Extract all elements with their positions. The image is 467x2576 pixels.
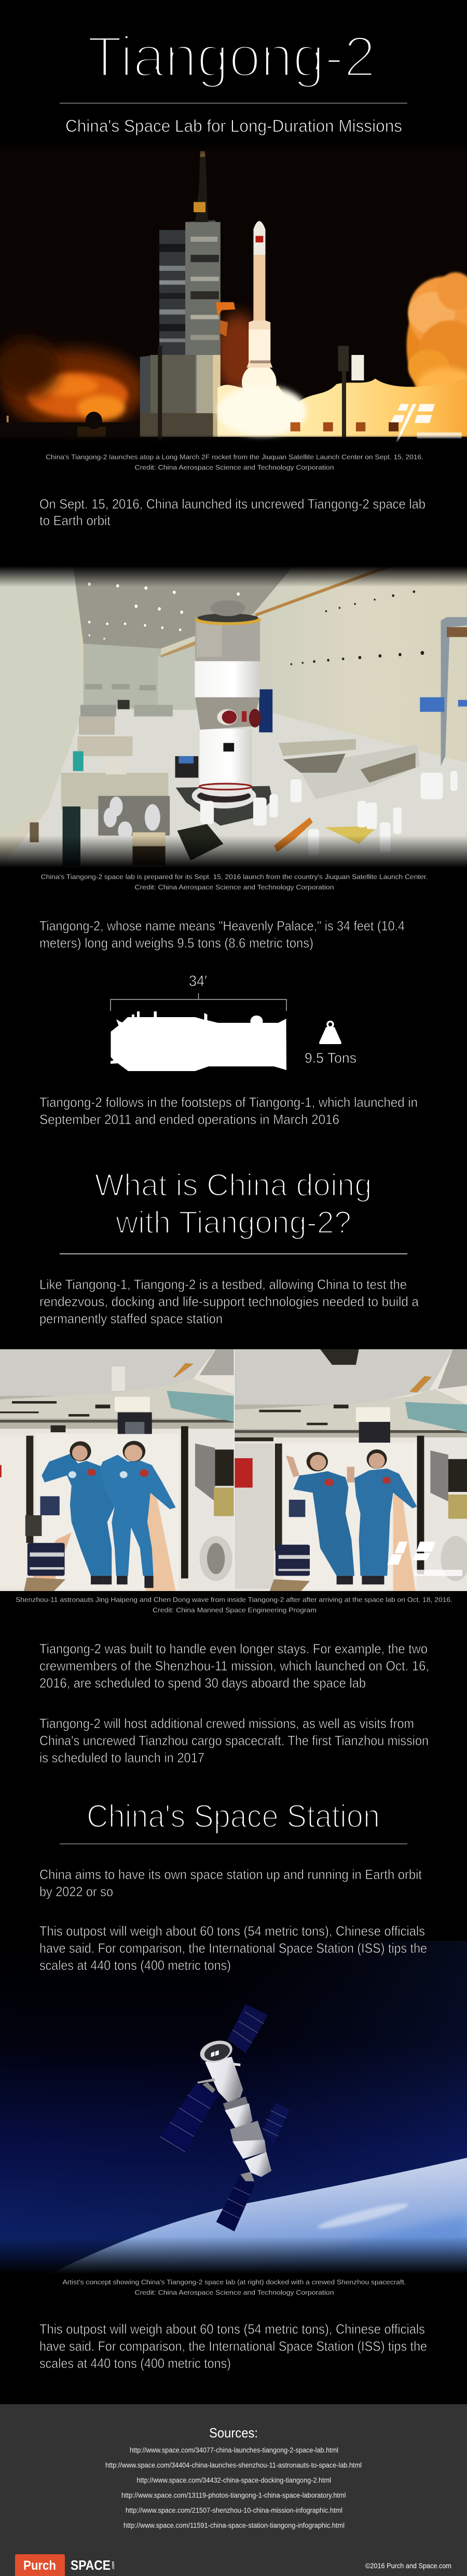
source links bbox=[105, 2446, 362, 2529]
text: longer stays: Tiangong-2 was built to handle even longer stays. For example, the two bbox=[39, 1641, 428, 1656]
text: 2022 goal: China aims to have its own space station up and running in Earth orbit bbox=[39, 1867, 422, 1882]
floodlight pole and lamp bbox=[158, 346, 364, 441]
text: outpost weight, repeated: scales at 440 tons (400 metric tons) bbox=[39, 2355, 231, 2371]
heading: what is China doing: with Tiangong-2? bbox=[115, 1205, 351, 1240]
text: launch date bbox=[39, 496, 425, 528]
left horizon glow bbox=[0, 338, 146, 430]
length label: 34′ bbox=[189, 973, 207, 990]
divider bbox=[234, 1349, 235, 1592]
caption: assembly hall: China's Tiangong-2 space lab is prepared for its Sept. 15, 2016 launch from the country's Jiuquan Satellite Launch Center. bbox=[41, 873, 428, 881]
text: footsteps: September 2011 and ended operations in March 2016 bbox=[39, 1112, 339, 1127]
sources heading: Sources: bbox=[209, 2425, 258, 2441]
text: longer stays: 2016, are scheduled to spend 30 days aboard the space lab bbox=[39, 1675, 366, 1691]
heading: what is China doing bbox=[60, 1168, 407, 1254]
text: outpost weight, repeated bbox=[39, 2321, 427, 2371]
wall dot rows bbox=[291, 591, 424, 665]
text: dimensions: Tiangong-2, whose name means "Heavenly Palace," is 34 feet (10.4 bbox=[39, 918, 405, 934]
text: testbed bbox=[39, 1277, 419, 1326]
caption: assembly hall: Credit: China Aerospace Science and Technology Corporation bbox=[135, 883, 334, 891]
logo: Purch: Purch bbox=[23, 2558, 56, 2573]
watermark logo bbox=[387, 1542, 462, 1576]
caption: launch: Credit: China Aerospace Science and Technology Corporation bbox=[135, 463, 334, 471]
rocket bbox=[246, 221, 272, 368]
icon: weight bbox=[319, 1021, 341, 1044]
back hall benches bbox=[61, 700, 173, 809]
heading: China's Space Station: China's Space Station bbox=[87, 1799, 380, 1834]
text: testbed: rendezvous, docking and life-support technologies needed to build a bbox=[39, 1294, 419, 1309]
hall walls, ceiling, floor bbox=[0, 564, 467, 869]
photo: assembly hall bbox=[0, 564, 467, 869]
text: launch date: to Earth orbit bbox=[39, 513, 111, 528]
text: 2022 goal bbox=[39, 1867, 422, 1899]
text: dimensions: meters) long and weighs 9.5 tons (8.6 metric tons) bbox=[39, 935, 313, 951]
panel: sources footer bbox=[0, 2404, 467, 2576]
ceiling lights bbox=[88, 582, 240, 640]
caption: station bbox=[62, 2278, 406, 2296]
photo: rocket launch bbox=[0, 143, 467, 446]
turntable under module bbox=[176, 783, 272, 826]
text: 2022 goal: by 2022 or so bbox=[39, 1884, 113, 1899]
solar panels bbox=[160, 2004, 290, 2231]
text: outpost weight, first mention bbox=[39, 1923, 427, 1973]
ground silhouettes bbox=[0, 412, 399, 437]
earth limb bbox=[42, 2158, 467, 2278]
left frame interior bbox=[0, 1349, 234, 1592]
text: footsteps bbox=[39, 1094, 418, 1127]
label: weight: 9.5 Tons bbox=[305, 1050, 356, 1066]
bracket bbox=[111, 993, 286, 1011]
text: longer stays bbox=[39, 1641, 429, 1691]
spacecraft silhouette bbox=[111, 1011, 286, 1071]
right frame interior bbox=[235, 1349, 467, 1592]
caption: station: Credit: China Aerospace Science and Technology Corporation bbox=[135, 2289, 334, 2296]
logo: Space.com: SPACE bbox=[71, 2557, 111, 2573]
photo: astronauts inside Tiangong-2 bbox=[0, 1349, 467, 1592]
copyright: ©2016 Purch and Space.com bbox=[365, 2561, 451, 2570]
text: outpost weight, repeated: This outpost will weigh about 60 tons (54 metric tons), Chinese officials bbox=[39, 2321, 425, 2337]
source links: http://www.space.com/11591-china-space-station-tiangong-infographic.html bbox=[123, 2522, 345, 2529]
source links: http://www.space.com/34404-china-launches-shenzhou-11-astronauts-to-space-lab.html bbox=[105, 2461, 362, 2469]
source links: http://www.space.com/13119-photos-tiangong-1-china-space-laboratory.html bbox=[121, 2491, 346, 2499]
orange trolley bbox=[274, 817, 313, 852]
Tiangong-2 module bbox=[195, 600, 261, 797]
text: additional missions: Tiangong-2 will host additional crewed missions, as well as visits from bbox=[39, 1716, 414, 1731]
text: outpost weight, first mention: This outpost will weigh about 60 tons (54 metric tons), Chinese officials bbox=[39, 1923, 425, 1939]
source links: http://www.space.com/21507-shenzhou-10-china-mission-infographic.html bbox=[126, 2506, 342, 2514]
source links: http://www.space.com/34077-china-launches-tiangong-2-space-lab.html bbox=[130, 2446, 338, 2454]
wall details bbox=[85, 564, 467, 766]
glow behind tower bbox=[220, 304, 253, 388]
smoke cloud right bbox=[405, 270, 467, 387]
watermark logo bbox=[391, 404, 462, 446]
mast bbox=[194, 151, 208, 222]
astronauts, right frame bbox=[286, 1449, 417, 1584]
text: additional missions bbox=[39, 1716, 429, 1765]
text: dimensions bbox=[39, 918, 405, 951]
caption: assembly hall bbox=[41, 873, 428, 891]
technicians bbox=[200, 771, 458, 856]
solar array stands bbox=[279, 739, 420, 844]
text: launch date: On Sept. 15, 2016, China launched its uncrewed Tiangong-2 space lab bbox=[39, 496, 425, 512]
text: footsteps: Tiangong-2 follows in the footsteps of Tiangong-1, which launched in bbox=[39, 1094, 418, 1110]
caption: astronauts: Shenzhou-11 astronauts Jing Haipeng and Chen Dong wave from inside Tiangong-2 after after arriving at the space lab on Oct. 18, 2016. bbox=[16, 1596, 452, 1604]
logo: Purch bbox=[15, 2554, 65, 2576]
text: outpost weight, first mention: scales at 440 tons (400 metric tons) bbox=[39, 1957, 231, 1973]
work table area and crew bbox=[30, 756, 224, 866]
photo: station in orbit bbox=[0, 1941, 467, 2278]
heading: what is China doing: What is China doing bbox=[94, 1168, 372, 1202]
title: Tiangong-2 bbox=[87, 25, 376, 89]
logo: Space.com: .com bbox=[112, 2561, 115, 2570]
caption: astronauts bbox=[16, 1596, 452, 1614]
caption: launch: China's Tiangong-2 launches atop a Long March 2F rocket from the Jiuquan Satellite Launch Center on Sept. 15, 2016. bbox=[46, 453, 423, 461]
caption: station: Artist's concept showing China's Tiangong-2 space lab (at right) docked with a crewed Shenzhou spacecraft. bbox=[62, 2278, 406, 2286]
flame jets at tower bbox=[216, 302, 235, 317]
text: outpost weight, first mention: have said. For comparison, the International Space Station (ISS) tips the bbox=[39, 1940, 427, 1956]
diagram: spacecraft length bbox=[111, 973, 286, 1071]
text: testbed: permanently staffed space station bbox=[39, 1311, 223, 1326]
text: testbed: Like Tiangong-1, Tiangong-2 is a testbed, allowing China to test the bbox=[39, 1277, 407, 1292]
source links: http://www.space.com/34432-china-space-docking-tiangong-2.html bbox=[137, 2476, 331, 2484]
caption: launch bbox=[46, 453, 423, 471]
astronauts, left frame bbox=[42, 1441, 176, 1588]
station body bbox=[197, 2037, 271, 2181]
caption: astronauts: Credit: China Manned Space Engineering Program bbox=[153, 1606, 317, 1614]
text: additional missions: is scheduled to launch in 2017 bbox=[39, 1750, 204, 1765]
subtitle: China's Space Lab for Long-Duration Missions bbox=[65, 116, 402, 135]
launch tower bbox=[140, 220, 221, 437]
text: additional missions: China's uncrewed Tianzhou cargo spacecraft. The first Tianzhou mission bbox=[39, 1733, 429, 1748]
main exhaust plume bbox=[217, 364, 467, 437]
text: outpost weight, repeated: have said. For comparison, the International Space Station (ISS) tips the bbox=[39, 2338, 427, 2354]
text: longer stays: crewmembers of the Shenzhou-11 mission, which launched on Oct. 16, bbox=[39, 1658, 429, 1674]
